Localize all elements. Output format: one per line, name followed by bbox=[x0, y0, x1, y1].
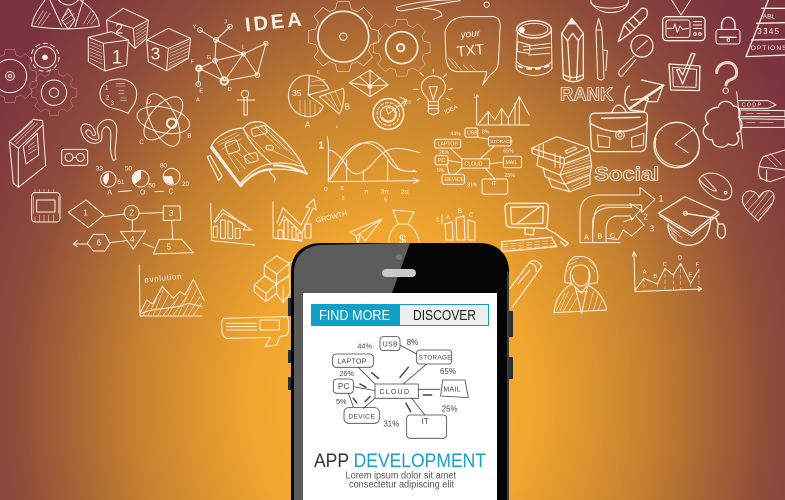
icon: hex cubes bbox=[254, 256, 300, 303]
doodles: top middle cluster bbox=[244, 0, 529, 129]
icon: magnifier bbox=[619, 35, 653, 77]
chart: sine waves: 3π bbox=[381, 188, 389, 195]
icon: triple arrow: 1 bbox=[658, 194, 664, 204]
icon: businessman bbox=[32, 0, 99, 29]
small cloud network diagram: 65% bbox=[503, 148, 514, 154]
chart: donut percentages: 80 bbox=[160, 162, 168, 169]
icon: pen bbox=[596, 18, 607, 80]
icon: pencil bbox=[562, 18, 583, 82]
chart: line graph: F bbox=[696, 263, 700, 269]
icon: speech bubble your text: your bbox=[459, 28, 481, 41]
chart: 3D bars: 1 bbox=[436, 218, 440, 224]
chart: peaks graph: 14 bbox=[473, 93, 479, 99]
chart: 3D bars bbox=[436, 209, 475, 240]
cloud network diagram: MAIL bbox=[443, 387, 461, 394]
chart: line graph bbox=[632, 252, 702, 292]
cloud network diagram: 25% bbox=[442, 405, 458, 414]
icon: mouse bbox=[699, 173, 732, 200]
icon: clock bbox=[654, 122, 699, 168]
small cloud network diagram: 8% bbox=[482, 129, 490, 135]
icon: left gear bbox=[0, 49, 37, 103]
small cloud network diagram: LAPTOP bbox=[438, 141, 458, 147]
icon: tin can bbox=[516, 21, 552, 75]
chart: sine waves: o bbox=[324, 186, 328, 193]
small cloud network diagram: MAIL bbox=[506, 160, 518, 166]
icon: pie chart: B bbox=[345, 102, 350, 111]
icon: cube 3: 3 bbox=[151, 43, 160, 63]
tab: find more bbox=[311, 304, 400, 326]
icon: diagonal pencil bbox=[618, 8, 647, 42]
icon: money bag bbox=[389, 210, 419, 250]
chart: line graph: B bbox=[653, 274, 657, 280]
phone screen bbox=[303, 293, 497, 500]
icon: network graph: G bbox=[207, 55, 211, 61]
chart: donut percentages: 33 bbox=[96, 166, 104, 173]
icon: atom: B bbox=[187, 133, 191, 139]
icon: network graph: Y bbox=[193, 24, 197, 30]
icon: right edge pie bbox=[759, 150, 785, 182]
small cloud network diagram: 44% bbox=[450, 132, 461, 138]
chart: growth bars: GROWTH bbox=[315, 210, 348, 225]
text: IDEA: IDEA bbox=[244, 8, 306, 37]
icon: medium gear bbox=[373, 19, 430, 76]
icon: big gear bbox=[308, 2, 378, 72]
tab bar bbox=[311, 304, 488, 326]
doodles: left middle cluster bbox=[32, 162, 300, 347]
cloud network diagram: CLOUD bbox=[379, 389, 410, 396]
phone right edge bbox=[507, 270, 509, 500]
icon: flowchart: 6 bbox=[97, 238, 102, 247]
chart: sine waves: 2π bbox=[401, 189, 409, 196]
doodles: chart row above phone bbox=[273, 199, 475, 250]
icon: flowchart bbox=[68, 200, 193, 254]
icon: book bbox=[9, 119, 46, 187]
icon: triple arrow bbox=[580, 187, 664, 243]
icon: pie chart: 35 bbox=[292, 88, 302, 98]
chart: growth bars bbox=[273, 199, 348, 241]
icon: cassette glasses bbox=[62, 149, 88, 165]
chart: sine waves: 2 bbox=[342, 196, 345, 202]
icon: speech bubble with list bbox=[100, 79, 137, 113]
icon: pie chart: c bbox=[336, 124, 339, 129]
icon: network graph: F bbox=[191, 59, 195, 65]
cloud network diagram: PC bbox=[338, 382, 350, 391]
icon: network graph: A bbox=[196, 98, 200, 104]
cloud network diagram bbox=[333, 337, 468, 438]
icon: network graph bbox=[191, 19, 268, 104]
icon: cross figure bbox=[237, 90, 255, 115]
icon: triple arrow: C bbox=[610, 231, 616, 240]
icon: network graph: L bbox=[242, 44, 245, 50]
chart: donut percentages: A bbox=[107, 190, 112, 197]
chart: donut percentages: O bbox=[140, 190, 146, 197]
doodles: top left cluster bbox=[0, 0, 268, 187]
icon: triple arrow: A bbox=[584, 232, 589, 241]
title: app development: APP DEVELOPMENT bbox=[314, 450, 486, 472]
icon: coin top bbox=[591, 0, 629, 13]
chart: 3D bars: C bbox=[469, 213, 474, 219]
icon: speech bubble your text bbox=[445, 17, 500, 85]
chart: 3D bars: B bbox=[458, 209, 462, 215]
icon: network graph: D bbox=[228, 87, 232, 93]
small cloud network diagram: PC bbox=[438, 158, 445, 164]
icon: computer bbox=[502, 203, 568, 252]
chart: evolution: evolution bbox=[144, 272, 183, 285]
icon: cube 1 bbox=[88, 32, 128, 71]
icon: graduation cap bbox=[658, 197, 725, 245]
cloud network diagram: 31% bbox=[383, 420, 399, 429]
smartphone bbox=[288, 243, 513, 500]
cloud network diagram: STORAGE bbox=[419, 355, 452, 362]
icon: cube 2: 2 bbox=[115, 21, 123, 37]
icon: paper plane bbox=[350, 219, 382, 244]
phone side buttons bbox=[288, 298, 513, 390]
cloud network diagram: DEVICE bbox=[348, 413, 375, 420]
chart: line graph: C bbox=[663, 262, 667, 268]
icon: triple arrow: 3 bbox=[649, 223, 654, 233]
chart: donut percentages: 61 bbox=[117, 179, 125, 186]
chart: falling bars bbox=[211, 203, 255, 245]
icon: swoosh bbox=[397, 0, 489, 19]
icon: long speech bubble bbox=[222, 317, 289, 347]
icon: cloud bbox=[703, 101, 742, 147]
tab: find more: FIND MORE bbox=[319, 307, 390, 324]
icon: triple arrow: 2 bbox=[643, 212, 648, 221]
icon: cube 3 bbox=[147, 28, 191, 71]
icon: flowchart: 5 bbox=[167, 242, 172, 251]
small cloud network diagram: 5% bbox=[437, 168, 445, 174]
tab: discover: DISCOVER bbox=[413, 307, 476, 324]
chart: line graph: A bbox=[643, 269, 647, 275]
phone glass reflection bbox=[294, 243, 410, 500]
cloud network diagram: 26% bbox=[339, 369, 354, 378]
small cloud network diagram: USB bbox=[467, 131, 478, 137]
icon: heart bbox=[742, 191, 774, 221]
small cloud network diagram: IT bbox=[492, 181, 497, 187]
cloud network diagram: 5% bbox=[336, 397, 347, 406]
icon: open book bbox=[207, 122, 307, 186]
chart: sine waves: π bbox=[340, 186, 344, 192]
chart: sine waves: 1 bbox=[318, 140, 324, 151]
icon: stacked books bbox=[532, 137, 592, 192]
cloud network diagram: LAPTOP bbox=[337, 358, 367, 365]
icon: flowchart: 2 bbox=[129, 208, 134, 217]
small cloud network diagram: DEVICE bbox=[445, 177, 464, 183]
icon: pie chart bbox=[288, 75, 350, 129]
icon: spiral target bbox=[373, 97, 412, 129]
doodles: lower right cluster bbox=[502, 150, 785, 313]
small cloud network diagram: STORAGE bbox=[490, 139, 513, 145]
icon: briefcase bbox=[590, 105, 647, 152]
icon: pyramid options: 3345 bbox=[757, 27, 780, 36]
icon: atom: D bbox=[147, 99, 152, 105]
small cloud network diagram: 26% bbox=[439, 150, 450, 156]
icon: curly symbol bbox=[81, 120, 117, 161]
chart: sine waves bbox=[318, 137, 420, 204]
icon: speech bubble with list: 1 bbox=[105, 85, 109, 91]
icon: woman bbox=[554, 257, 607, 313]
icon: pie chart: A bbox=[305, 120, 311, 129]
icon: triple arrow: B bbox=[597, 232, 602, 241]
icon: pyramid options bbox=[746, 0, 785, 57]
chart: sine waves: 5 bbox=[384, 198, 387, 204]
chart: donut percentages: 50 bbox=[148, 182, 156, 189]
icon: flowchart: 4 bbox=[130, 235, 135, 244]
subtitle text bbox=[346, 470, 456, 490]
small cloud network diagram bbox=[435, 128, 522, 194]
cloud network diagram: USB bbox=[383, 342, 398, 349]
icon: right gear bbox=[31, 70, 77, 116]
icon: cube 2 bbox=[107, 8, 148, 48]
icon: open box bbox=[317, 69, 388, 97]
chart: donut percentages bbox=[96, 162, 190, 197]
icon: speech bubble your text: TXT bbox=[456, 42, 485, 61]
text: RANK: RANK bbox=[560, 84, 614, 105]
small cloud network diagram: 25% bbox=[504, 173, 515, 179]
icon: pyramid options: ABL bbox=[763, 13, 776, 20]
icon: sprocket bbox=[31, 43, 59, 71]
icon: money bag: $ bbox=[399, 232, 407, 247]
phone speaker bbox=[382, 269, 416, 277]
icon: speech bubble with list: 3 bbox=[111, 101, 115, 107]
cloud network diagram: 8% bbox=[407, 338, 418, 347]
icon: glasses bbox=[625, 80, 663, 112]
text: Social: Social bbox=[594, 165, 659, 186]
icon: signpost bbox=[737, 92, 785, 148]
icon: atom: C bbox=[139, 140, 144, 146]
chart: peaks graph bbox=[473, 93, 529, 125]
icon: network graph: E bbox=[199, 89, 203, 95]
icon: radio bbox=[663, 0, 705, 41]
icon: microchip bbox=[32, 189, 60, 222]
subtitle text: consectetur adipiscing elit bbox=[349, 480, 454, 490]
cloud network diagram: IT bbox=[422, 417, 429, 426]
icon: spiral target: YES bbox=[402, 99, 412, 105]
cloud network diagram: 65% bbox=[440, 367, 456, 376]
icon: light bulb bbox=[414, 69, 459, 116]
chart: donut percentages: 50 bbox=[125, 166, 133, 173]
chart: 3D bars: A bbox=[446, 215, 450, 221]
chart: donut percentages: 20 bbox=[182, 181, 190, 188]
chart: donut percentages: C bbox=[168, 188, 173, 195]
icon: big pencil bbox=[510, 261, 542, 307]
icon: check box bbox=[669, 53, 700, 91]
icon: open box: C bbox=[317, 69, 321, 75]
icon: network graph: J bbox=[224, 19, 227, 25]
chart: evolution bbox=[139, 265, 204, 316]
chart: sine waves: π bbox=[364, 188, 369, 195]
icon: question mark bbox=[717, 63, 737, 93]
cloud network diagram: 44% bbox=[357, 341, 372, 350]
icon: cube 1: 1 bbox=[112, 47, 122, 68]
phone body bbox=[291, 243, 509, 500]
subtitle text: Lorem ipsum dolor sit amet bbox=[346, 470, 456, 482]
icon: flowchart: 3 bbox=[169, 209, 174, 218]
chart: line graph: D bbox=[678, 255, 682, 261]
icon: padlock bbox=[716, 17, 740, 44]
icon: flowchart: 1 bbox=[83, 209, 88, 218]
icon: speech bubble with list: 2 bbox=[106, 95, 110, 101]
icon: atom bbox=[135, 89, 192, 151]
small cloud network diagram: CLOUD bbox=[465, 161, 483, 167]
chart: line graph: E bbox=[688, 273, 692, 279]
doodles: top right cluster bbox=[516, 0, 785, 168]
small cloud network diagram: 31% bbox=[467, 183, 478, 189]
icon: light bulb: IDEA bbox=[444, 105, 459, 116]
phone camera bbox=[396, 254, 402, 260]
icon: signpost: CODP bbox=[742, 103, 762, 109]
